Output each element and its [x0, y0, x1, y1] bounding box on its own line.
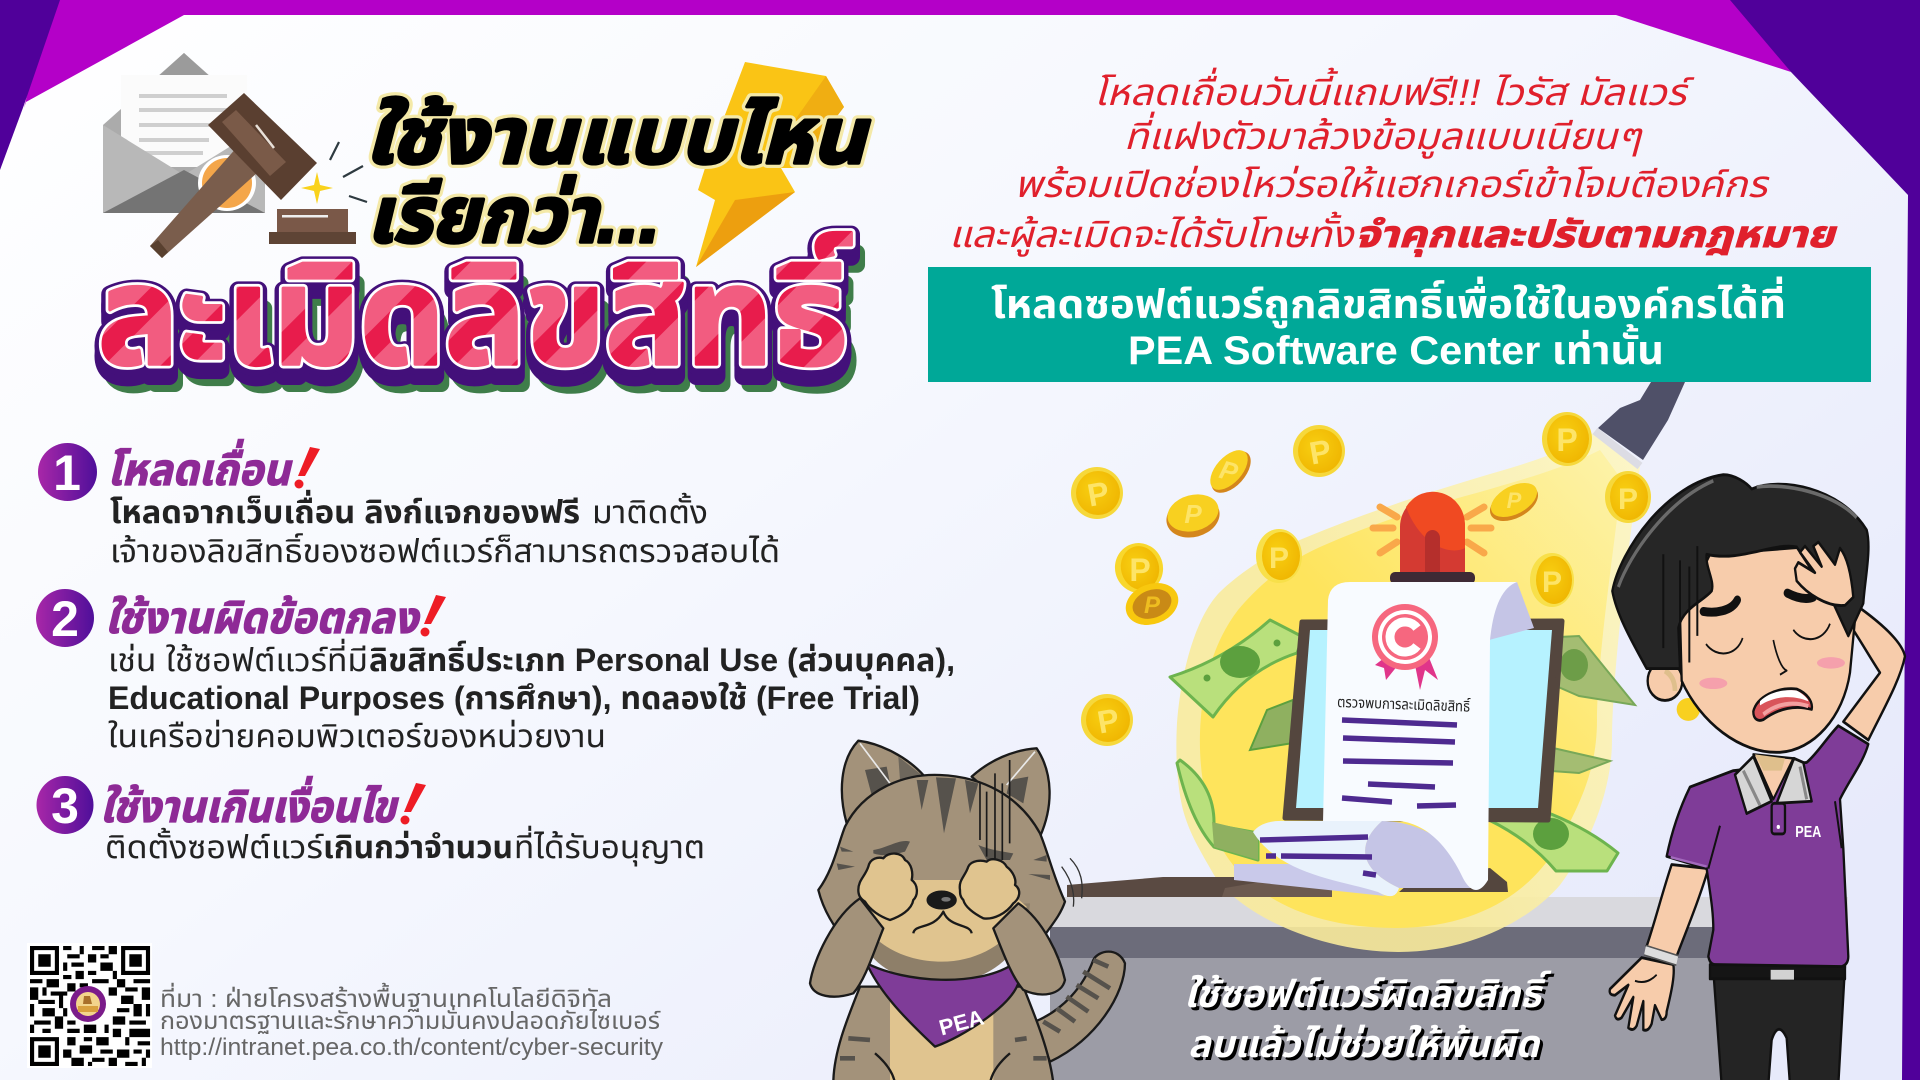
body text 2: ในเครือข่ายคอมพิวเตอร์ของหน่วยงาน [108, 718, 606, 754]
heading 2: ใช้งานผิดข้อตกลง [105, 594, 421, 643]
coin [1256, 529, 1302, 583]
man eyebrows [1703, 593, 1813, 612]
source credit: กองมาตรฐานและรักษาความมั่นคงปลอดภัยไซเบอร์ [160, 1005, 661, 1035]
man face [1680, 546, 1855, 752]
cat motion lines [1062, 858, 1082, 907]
coin: P [1307, 432, 1334, 472]
title: line one and two: เรียกว่า... [367, 171, 660, 259]
man shirt [1667, 726, 1868, 967]
cat bandana [867, 963, 1018, 1047]
copyright notice document [1234, 582, 1534, 896]
cat nose and mouth [913, 892, 972, 933]
title: copyright violation wordmark: ละเมิดลิขสิทธิ์ [98, 244, 851, 406]
coin: P [1144, 592, 1161, 619]
curled paper [1253, 821, 1399, 896]
lavender fold [1365, 821, 1440, 888]
floor bands [1050, 897, 1848, 1080]
man hair [1612, 475, 1868, 669]
number badge 3 [36, 776, 94, 834]
siren [1373, 492, 1491, 584]
body text 3: ที่ได้รับอนุญาต [514, 825, 705, 866]
document lines [1260, 720, 1457, 875]
coin [1530, 553, 1574, 607]
icon: gavel [150, 93, 367, 258]
man cheeks [1699, 657, 1845, 689]
man neck and collar [1735, 754, 1812, 834]
man character [1610, 475, 1905, 1080]
title: line one and two: เรียกว่า... [367, 171, 660, 259]
coin: P [1129, 552, 1151, 588]
QR code [27, 943, 152, 1068]
source credit: ที่มา : ฝ่ายโครงสร้างพื้นฐานเทคโนโลยีดิจิทัล [160, 982, 612, 1013]
cat arms [810, 898, 1065, 997]
slogan on floor [1184, 970, 1555, 1069]
coin [1293, 425, 1345, 477]
warning text in red: และผู้ละเมิดจะได้รับโทษทั้ง [949, 211, 1355, 257]
icon: lightning bolt [696, 62, 844, 267]
siren rays [1373, 507, 1491, 553]
icon: envelope with document [103, 53, 265, 213]
cat character [810, 741, 1125, 1080]
cat bandana: PEA [936, 1005, 987, 1040]
desk [1067, 868, 1508, 897]
coin [1109, 538, 1169, 598]
man mouth [1753, 689, 1812, 720]
icon: flashlight [1595, 382, 1685, 466]
section 2: breach of licence terms [36, 589, 955, 754]
man lower arm and hand [1610, 865, 1708, 1030]
man closed eyes [1706, 624, 1830, 653]
page curl [1489, 582, 1534, 640]
coin: P [1095, 701, 1122, 741]
man hand on forehead [1795, 542, 1853, 606]
title: line one and two: ใช้งานแบบไหน [365, 92, 870, 180]
man ear [1648, 661, 1682, 700]
coin: P [1216, 454, 1242, 488]
cat head [818, 775, 1065, 983]
coin [1605, 471, 1651, 523]
body text 3: เกินกว่าจำนวน [323, 829, 513, 865]
slogan on floor: ลบแล้วไม่ช่วยให้พ้นผิด [1191, 1027, 1544, 1069]
lavender underside of roll [1365, 821, 1472, 888]
warning text in red: ที่แฝงตัวมาล้วงข้อมูลแบบเนียนๆ [1124, 111, 1643, 159]
warning text in red: พร้อมเปิดช่องโหว่รอให้แฮกเกอร์เข้าโจมตีองค์กร [1014, 164, 1770, 205]
warning text in red: จำคุกและปรับตามกฎหมาย [1355, 214, 1838, 257]
lower paper sheet [1234, 864, 1385, 896]
coin [1203, 443, 1258, 500]
slogan on floor: ใช้ซอฟต์แวร์ผิดลิขสิทธิ์ [1187, 973, 1555, 1019]
coin [1071, 467, 1123, 519]
flashlight beam [1176, 432, 1640, 952]
cat body [833, 987, 1053, 1080]
warning text in red: โหลดเถื่อนวันนี้แถมฟรี!!! ไวรัส มัลแวร์ [1094, 67, 1694, 113]
body text 3: ติดตั้งซอฟต์แวร์ [105, 827, 325, 865]
title: copyright violation wordmark: ละเมิดลิขสิทธิ์ [98, 232, 851, 394]
hidden coin behind man [1677, 698, 1700, 721]
slogan on floor: ใช้ซอฟต์แวร์ผิดลิขสิทธิ์ [1184, 970, 1552, 1016]
coin: P [1085, 474, 1112, 514]
title: copyright violation wordmark: ละเมิดลิขสิทธิ์ [98, 232, 851, 394]
coin [1081, 694, 1133, 746]
title: line one and two: ใช้งานแบบไหน [365, 92, 870, 180]
document caption: ตรวจพบการละเมิดลิขสิทธิ์ [1337, 693, 1471, 716]
man shirt: PEA [1795, 824, 1821, 841]
heading 3: ใช้งานเกินเงื่อนไข [100, 776, 399, 832]
body text 2: เช่น ใช้ซอฟต์แวร์ที่มี [108, 638, 368, 678]
body text 1 [110, 489, 780, 569]
warning text in red [949, 67, 1838, 257]
coin: P [1184, 499, 1202, 529]
body text 1: เจ้าของลิขสิทธิ์ของซอฟต์แวร์ก็สามารถตรวจสอบได้ [110, 533, 780, 569]
source credit [160, 982, 663, 1061]
cat tail [1035, 952, 1125, 1062]
number badge 2: 2 [51, 591, 79, 647]
paper [1323, 582, 1517, 890]
banknotes [1170, 620, 1635, 871]
title: line one and two [365, 92, 870, 259]
coin [1162, 489, 1224, 543]
man raised arm [1840, 603, 1905, 740]
cat paws covering eyes [858, 854, 1019, 920]
body text 2: ลิขสิทธิ์ประเภท Personal Use (ส่วนบุคคล), [369, 640, 955, 679]
cat ears [842, 741, 1050, 837]
section 3: exceeding licence conditions [36, 776, 705, 866]
heading 1: โหลดเถื่อน [107, 439, 292, 495]
body text 1: โหลดจากเว็บเถื่อน ลิงก์แจกของฟรี [110, 489, 580, 530]
slogan on floor: ลบแล้วไม่ช่วยให้พ้นผิด [1188, 1024, 1541, 1066]
body text 2: Educational Purposes (การศึกษา), ทดลองใช้ (Free Trial) [108, 680, 920, 716]
body text 3 [105, 825, 705, 866]
number badge 1: 1 [53, 445, 81, 501]
callout: teal banner: PEA Software Center เท่านั้น [1128, 323, 1664, 373]
copyright seal [1372, 604, 1438, 690]
man nose [1773, 640, 1787, 675]
coin: P [1618, 483, 1638, 516]
coin: P [1507, 488, 1522, 513]
coin [1542, 412, 1592, 466]
section 1: pirated downloads [38, 439, 780, 569]
coin: P [1269, 542, 1289, 575]
coin [1484, 476, 1544, 528]
cat gloom lines [980, 760, 1010, 860]
coin: P [1556, 422, 1578, 458]
source credit: http://intranet.pea.co.th/content/cyber-security [160, 1034, 663, 1061]
coin: P [1542, 566, 1562, 599]
coins [1071, 412, 1651, 746]
man trousers and belt [1710, 965, 1845, 1080]
monitor [1285, 621, 1562, 820]
callout: teal banner: โหลดซอฟต์แวร์ถูกลิขสิทธิ์เพื่อใช้ในองค์กรได้ที่ [991, 276, 1786, 329]
body text 1: มาติดตั้ง [592, 492, 708, 530]
coin [1120, 576, 1184, 632]
number badge 2 [36, 589, 94, 647]
number badge 1 [38, 443, 97, 501]
title: copyright violation wordmark: ละเมิดลิขสิทธิ์ [98, 234, 851, 396]
body text 2 [108, 638, 955, 754]
title: copyright violation wordmark: ละเมิดลิขสิทธิ์ [104, 252, 857, 414]
callout: teal banner [928, 267, 1871, 382]
number badge 3: 3 [51, 778, 79, 834]
man gloom lines [1663, 546, 1697, 662]
